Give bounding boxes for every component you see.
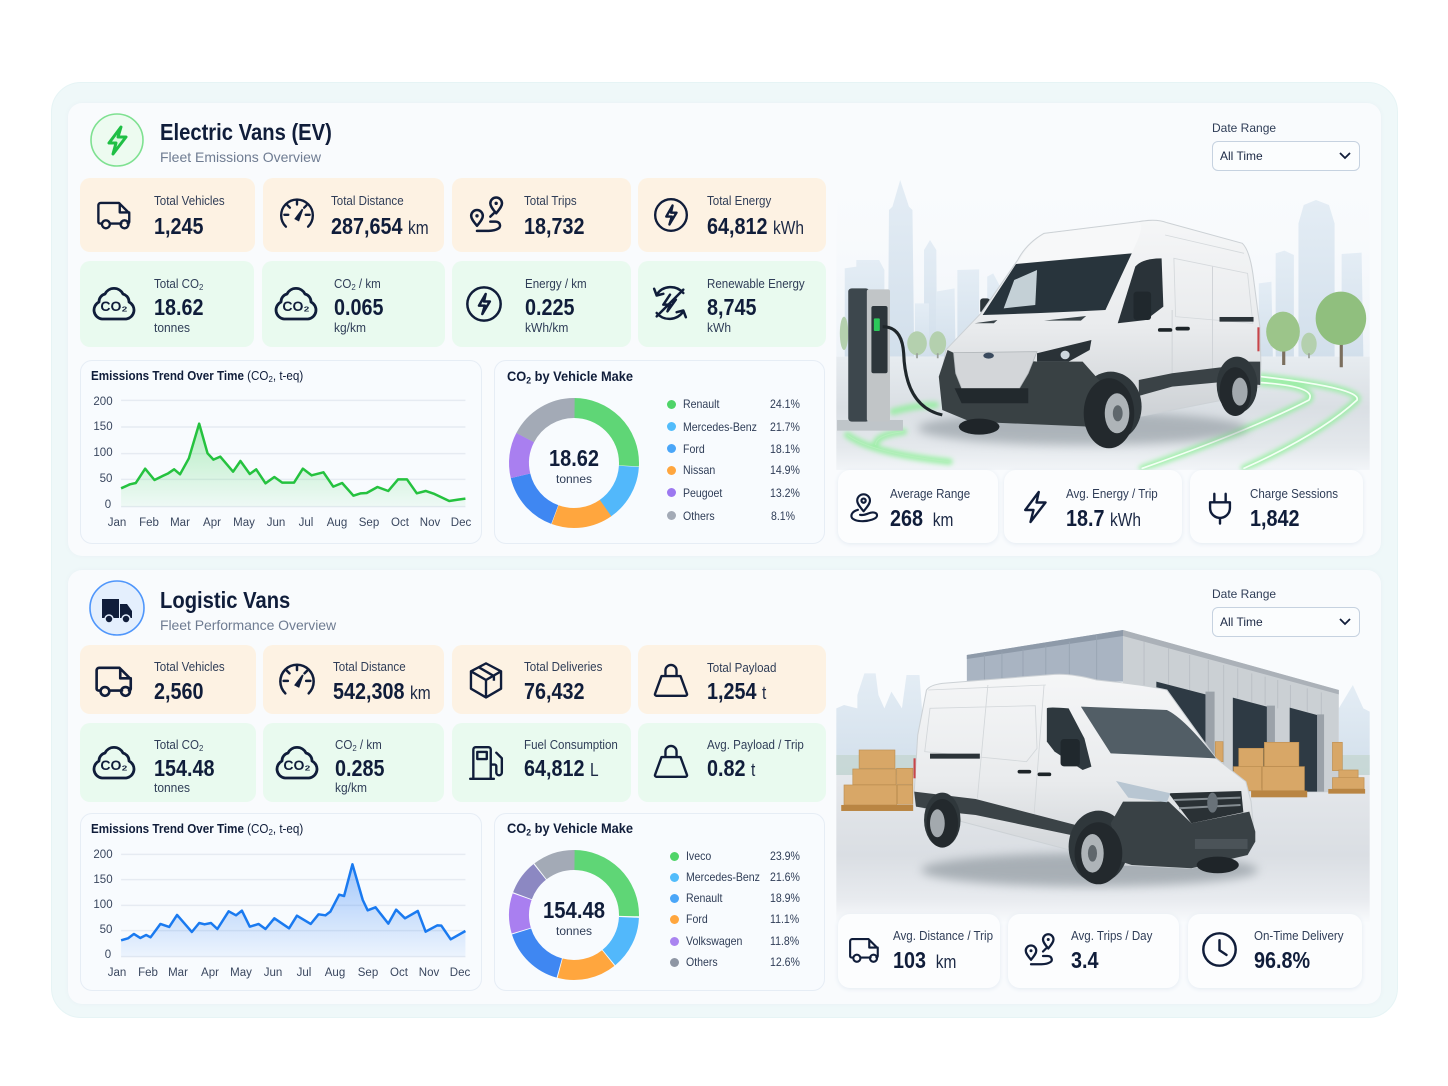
legend: EV makes: Mercedes-Benz	[683, 420, 757, 434]
card: average energy per trip: Avg. Energy / Trip	[1066, 487, 1158, 501]
line chart: EV emissions: Nov	[420, 517, 440, 529]
legend: logistic makes: Others	[686, 955, 718, 969]
line chart: EV emissions: May	[233, 517, 255, 529]
date range filter: logistic vans: Date Range	[1212, 587, 1276, 601]
card: CO2 per km logistic: 0.285	[335, 755, 385, 781]
card: CO2 per km logistic: CO₂	[283, 757, 311, 773]
card: CO2 per km: 0.065	[334, 294, 384, 320]
legend: EV makes: 13.2%	[770, 486, 800, 500]
card: renewable energy	[638, 261, 826, 347]
line chart: logistic emissions: Sep	[358, 967, 378, 979]
panel: electric vans section	[68, 103, 1381, 556]
panel: EV emissions trend chart: Emissions Trend Over Time (CO2, t-eq)	[90, 369, 303, 384]
card: CO2 per km logistic: CO2 / km	[335, 738, 382, 753]
legend: logistic makes: 18.9%	[770, 891, 800, 905]
card: total vehicles logistic: 2,560	[154, 678, 204, 704]
card: total deliveries	[452, 645, 631, 714]
card: fuel consumption	[452, 723, 631, 802]
line chart: EV emissions: Jun	[267, 517, 285, 529]
line chart: EV emissions: Feb	[139, 517, 159, 529]
legend: EV makes: Nissan	[683, 463, 715, 477]
card: total CO2: 18.62	[154, 294, 204, 320]
date range filter: electric vans	[1212, 121, 1360, 171]
card: average energy per trip: 18.7 kWh	[1066, 505, 1141, 531]
card: total energy: 64,812 kWh	[707, 213, 804, 239]
panel: logistic emissions trend chart: Emissions Trend Over Time (CO2, t-eq)	[90, 822, 303, 837]
line chart: logistic emissions: Oct	[390, 967, 409, 979]
card: renewable energy: kWh	[707, 321, 731, 335]
panel: EV emissions trend chart	[80, 360, 482, 544]
card: total energy	[638, 178, 826, 252]
line chart: EV emissions: Jan	[108, 517, 126, 529]
donut chart: EV makes: 18.62	[548, 444, 598, 470]
legend: EV makes: 18.1%	[770, 442, 800, 456]
card: CO2 per km: CO₂	[282, 298, 310, 314]
card: total CO2	[80, 261, 254, 347]
card: fuel consumption: Fuel Consumption	[524, 738, 618, 752]
card: total vehicles logistic: Total Vehicles	[154, 660, 225, 674]
card: charge sessions: Charge Sessions	[1250, 487, 1338, 501]
card: total vehicles	[80, 178, 255, 252]
heading: electric vans: Fleet Emissions Overview	[160, 149, 321, 165]
line chart: EV emissions	[93, 396, 471, 529]
card: total distance logistic	[263, 645, 444, 714]
card: total trips: 18,732	[524, 213, 585, 239]
card: on-time delivery: On-Time Delivery	[1254, 929, 1344, 943]
legend: EV makes: 24.1%	[770, 397, 800, 411]
card: CO2 per km: CO2 / km	[334, 277, 381, 292]
card: average distance per trip	[838, 914, 1000, 988]
card: average payload per trip	[638, 723, 826, 802]
card: average trips per day	[1008, 914, 1179, 988]
line chart: logistic emissions: Nov	[419, 967, 439, 979]
card: total energy: Total Energy	[707, 194, 771, 208]
heading: electric vans	[160, 119, 332, 165]
panel: EV CO2 by make	[494, 360, 825, 544]
line chart: EV emissions: Oct	[391, 517, 410, 529]
line chart: logistic emissions: 0	[105, 949, 111, 961]
card: average trips per day: Avg. Trips / Day	[1071, 929, 1152, 943]
donut chart: logistic makes	[508, 850, 639, 980]
line chart: EV emissions: Mar	[170, 517, 190, 529]
card: average range	[838, 470, 998, 543]
card: energy per km	[452, 261, 631, 347]
line chart: logistic emissions: Mar	[168, 967, 188, 979]
line chart: logistic emissions: 200	[93, 849, 113, 861]
panel: logistic CO2 by make: CO2 by Vehicle Make	[507, 821, 633, 837]
card: total CO2 logistic: 154.48	[154, 755, 215, 781]
donut chart: logistic makes: 154.48	[542, 896, 605, 922]
legend: logistic makes: 12.6%	[770, 955, 800, 969]
date range filter: logistic vans	[1212, 587, 1360, 637]
card: total CO2 logistic: Total CO2	[154, 738, 203, 753]
legend: logistic makes: Mercedes-Benz	[686, 870, 760, 884]
legend: EV makes: Renault	[683, 397, 719, 411]
illustration: electric van at charger	[836, 180, 1370, 470]
icon: green bolt badge	[90, 113, 144, 167]
card: renewable energy: Renewable Energy	[707, 277, 805, 291]
card: total distance logistic: Total Distance	[333, 660, 406, 674]
legend: logistic makes: Volkswagen	[686, 934, 742, 948]
line chart: EV emissions: 50	[100, 473, 112, 485]
card: total vehicles logistic	[80, 645, 256, 714]
line chart: logistic emissions: Aug	[325, 967, 345, 979]
card: total deliveries: Total Deliveries	[524, 660, 602, 674]
line chart: logistic emissions: May	[230, 967, 252, 979]
line chart: logistic emissions: Jan	[108, 967, 126, 979]
panel: logistic vans section	[68, 570, 1381, 1004]
card: total trips	[452, 178, 631, 252]
legend: logistic makes: 11.8%	[770, 934, 799, 948]
legend: EV makes: 8.1%	[771, 509, 795, 523]
card: total CO2: CO₂	[100, 298, 128, 314]
date range filter: electric vans: Date Range	[1212, 121, 1276, 135]
icon: blue truck badge	[89, 580, 145, 636]
card: energy per km: 0.225	[525, 294, 575, 320]
legend: EV makes: Peugoet	[683, 486, 722, 500]
line chart: EV emissions: Apr	[203, 517, 221, 529]
card: on-time delivery: 96.8%	[1254, 947, 1310, 973]
card: average distance per trip: Avg. Distance / Trip	[893, 929, 993, 943]
line chart: logistic emissions: 50	[100, 924, 112, 936]
card: total distance logistic: 542,308 km	[333, 678, 431, 704]
line chart: logistic emissions: 150	[93, 874, 113, 886]
panel: logistic emissions trend chart	[80, 813, 482, 991]
legend: EV makes: 21.7%	[770, 420, 800, 434]
card: CO2 per km logistic: kg/km	[335, 781, 367, 795]
line chart: logistic emissions: Feb	[138, 967, 158, 979]
heading: logistic vans	[160, 587, 336, 633]
card: fuel consumption: 64,812 L	[524, 755, 599, 781]
card: total payload	[638, 645, 826, 714]
card: total vehicles: 1,245	[154, 213, 204, 239]
line chart: EV emissions: Sep	[359, 517, 379, 529]
heading: logistic vans: Logistic Vans	[160, 587, 290, 613]
line chart: EV emissions: Dec	[451, 517, 471, 529]
date range filter: logistic vans: All Time	[1220, 615, 1263, 629]
card: charge sessions	[1190, 470, 1363, 543]
card: total CO2 logistic: tonnes	[154, 781, 190, 795]
heading: electric vans: Electric Vans (EV)	[160, 119, 332, 145]
line chart: logistic emissions: 100	[93, 899, 113, 911]
panel: logistic CO2 by make	[494, 813, 825, 991]
card: CO2 per km logistic	[263, 723, 444, 802]
card: renewable energy: 8,745	[707, 294, 757, 320]
line chart: EV emissions: Aug	[327, 517, 347, 529]
card: total CO2: Total CO2	[154, 277, 203, 292]
card: total CO2 logistic: CO₂	[100, 757, 128, 773]
card: total CO2: tonnes	[154, 321, 190, 335]
card: on-time delivery	[1188, 914, 1362, 988]
date range filter: electric vans: All Time	[1220, 149, 1263, 163]
legend: EV makes: Ford	[683, 442, 705, 456]
card: average distance per trip: 103 km	[893, 947, 956, 973]
card: total distance: Total Distance	[331, 194, 404, 208]
line chart: EV emissions: 100	[93, 447, 113, 459]
card: total CO2 logistic	[80, 723, 256, 802]
card: average range: Average Range	[890, 487, 970, 501]
card: total payload: Total Payload	[707, 661, 776, 675]
card: average payload per trip: 0.82 t	[707, 755, 755, 781]
legend: logistic makes: Iveco	[686, 849, 711, 863]
donut chart: EV makes: tonnes	[555, 472, 592, 486]
line chart: EV emissions: 200	[93, 396, 113, 408]
legend: logistic makes: 23.9%	[770, 849, 800, 863]
line chart: EV emissions: 0	[105, 499, 111, 511]
line chart: EV emissions: Jul	[299, 517, 313, 529]
illustration: logistic van at warehouse	[836, 630, 1370, 912]
legend: logistic makes: 11.1%	[770, 912, 799, 926]
card: energy per km: Energy / km	[525, 277, 587, 291]
card: CO2 per km: kg/km	[334, 321, 366, 335]
heading: logistic vans: Fleet Performance Overview	[160, 617, 336, 633]
donut chart: logistic makes: tonnes	[555, 924, 592, 938]
card: total vehicles: Total Vehicles	[154, 194, 225, 208]
card: energy per km: kWh/km	[525, 321, 568, 335]
card: CO2 per km	[262, 261, 445, 347]
legend: logistic makes: 21.6%	[770, 870, 800, 884]
card: total payload: 1,254 t	[707, 678, 766, 704]
card: total distance: 287,654 km	[331, 213, 429, 239]
card: average trips per day: 3.4	[1071, 947, 1099, 973]
card: total distance	[263, 178, 444, 252]
legend: EV makes	[667, 397, 800, 523]
legend: EV makes: Others	[683, 509, 715, 523]
line chart: logistic emissions	[93, 849, 470, 979]
line chart: logistic emissions: Jun	[264, 967, 282, 979]
line chart: logistic emissions: Apr	[201, 967, 219, 979]
panel: EV CO2 by make: CO2 by Vehicle Make	[507, 369, 633, 385]
line chart: logistic emissions: Dec	[450, 967, 470, 979]
line chart: logistic emissions: Jul	[297, 967, 311, 979]
legend: logistic makes: Ford	[686, 912, 708, 926]
card: average energy per trip	[1004, 470, 1182, 543]
card: charge sessions: 1,842	[1250, 505, 1300, 531]
card: total deliveries: 76,432	[524, 678, 585, 704]
card: average payload per trip: Avg. Payload / Trip	[707, 738, 804, 752]
card: total trips: Total Trips	[524, 194, 577, 208]
donut chart: EV makes	[509, 398, 639, 528]
card: average range: 268 km	[890, 505, 953, 531]
legend: EV makes: 14.9%	[770, 463, 800, 477]
legend: logistic makes	[670, 849, 800, 969]
legend: logistic makes: Renault	[686, 891, 722, 905]
line chart: EV emissions: 150	[93, 421, 113, 433]
